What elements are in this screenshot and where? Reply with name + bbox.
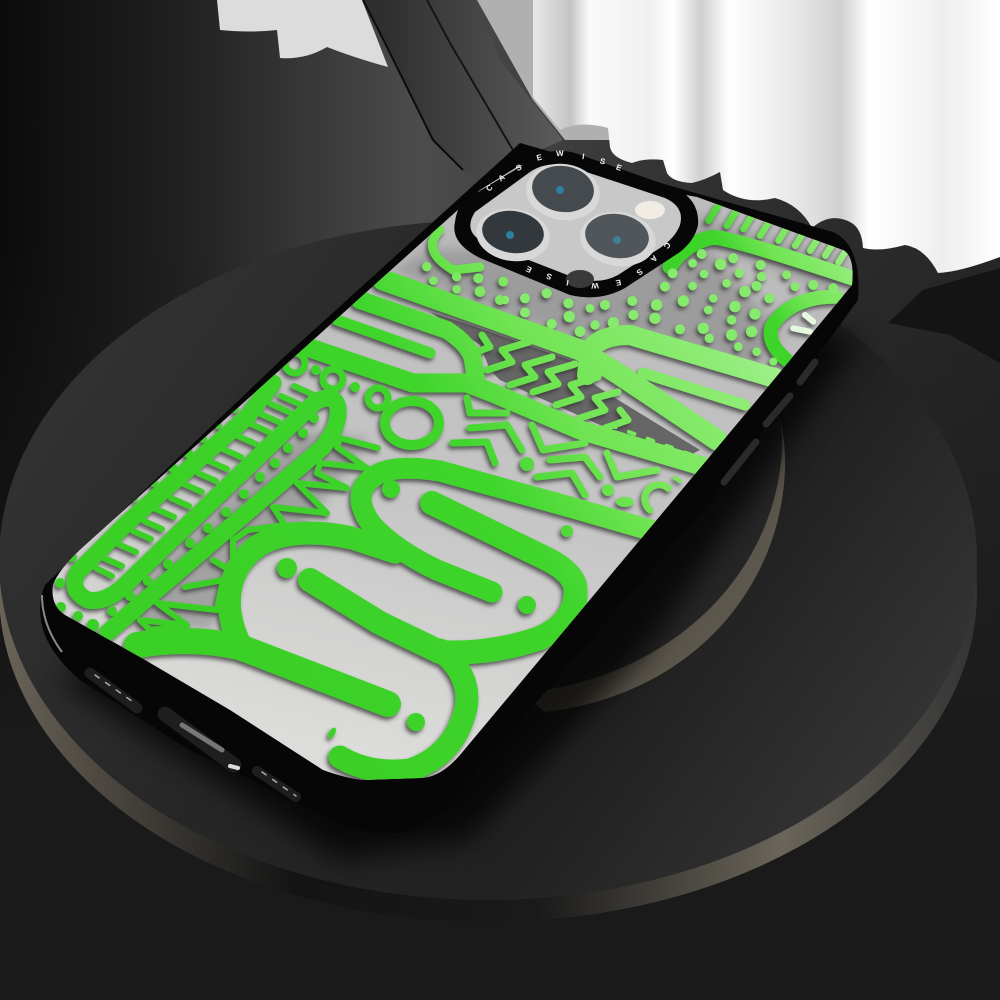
small ring lower right (645, 485, 668, 510)
bottom ports (90, 673, 296, 797)
curtain: right (533, 0, 1000, 273)
brand text ring: S (599, 157, 607, 167)
serpentine: lower loop (229, 533, 395, 650)
brand text ring: W (556, 149, 564, 158)
left inner bar (337, 320, 430, 353)
brand text ring: S (544, 271, 553, 281)
brand text ring: A (497, 172, 507, 183)
brand text ring: E (536, 152, 544, 163)
capsule inner dots (309, 413, 319, 423)
serpentine: bottom curve (340, 650, 467, 771)
brand text ring: A (648, 254, 659, 264)
curtain shadow backing (477, 0, 640, 140)
capsule outer dots (231, 405, 239, 413)
left capsule (75, 383, 338, 633)
brand text ring: E (614, 278, 622, 287)
middle U band (360, 300, 477, 387)
lens: top (522, 159, 604, 225)
curtain: left (217, 0, 388, 67)
serpentine dots (277, 558, 297, 578)
small rings (368, 388, 388, 408)
chevrons (453, 398, 657, 495)
phone case (40, 143, 858, 833)
right pedestal (888, 268, 1000, 363)
case back panel (52, 165, 853, 780)
large disc (0, 220, 977, 922)
top hatch (670, 206, 853, 360)
brand text ring: S (634, 267, 645, 278)
wavy line (140, 438, 378, 630)
lens: right (577, 207, 659, 271)
side buttons (724, 362, 815, 482)
phone shadow (60, 300, 860, 860)
dark arcs behind phone (363, 0, 563, 180)
bezel highlight (42, 595, 62, 652)
right inner bar (643, 373, 745, 405)
serpentine: arm (137, 641, 388, 704)
brand text ring: I (566, 278, 569, 287)
dot field right (501, 249, 838, 366)
camera island (454, 149, 698, 297)
long lower band (307, 347, 705, 467)
flash (635, 201, 665, 219)
right arc (771, 297, 837, 360)
right U (587, 335, 775, 378)
big ring (385, 401, 439, 445)
brand text ring: I (582, 152, 585, 161)
brand text ring: E (615, 163, 624, 173)
zigzag rows (468, 335, 628, 428)
serpentine: inner bar and right bend (310, 503, 576, 652)
brand text ring: E (524, 264, 533, 274)
brand text ring: W (591, 281, 599, 290)
brand text ring (484, 149, 672, 290)
brand text ring: C (484, 183, 495, 193)
camera frame (454, 151, 698, 297)
lens: left (473, 204, 553, 266)
brand text ring: S (514, 162, 524, 173)
top curved band (670, 237, 853, 278)
brand text ring: C (662, 240, 672, 251)
camera glass (470, 164, 681, 281)
lidar (566, 270, 594, 288)
serpentine: upper loop (361, 468, 650, 592)
green embossed pattern (55, 206, 853, 771)
dots group (55, 365, 634, 740)
top left arc (432, 230, 480, 270)
small disc (300, 232, 785, 712)
upper band (383, 280, 717, 440)
zigzag recess (430, 312, 700, 455)
case body (40, 143, 858, 833)
recessed shading (120, 215, 850, 630)
capsule ticks (96, 386, 312, 576)
dot field left (422, 262, 508, 305)
